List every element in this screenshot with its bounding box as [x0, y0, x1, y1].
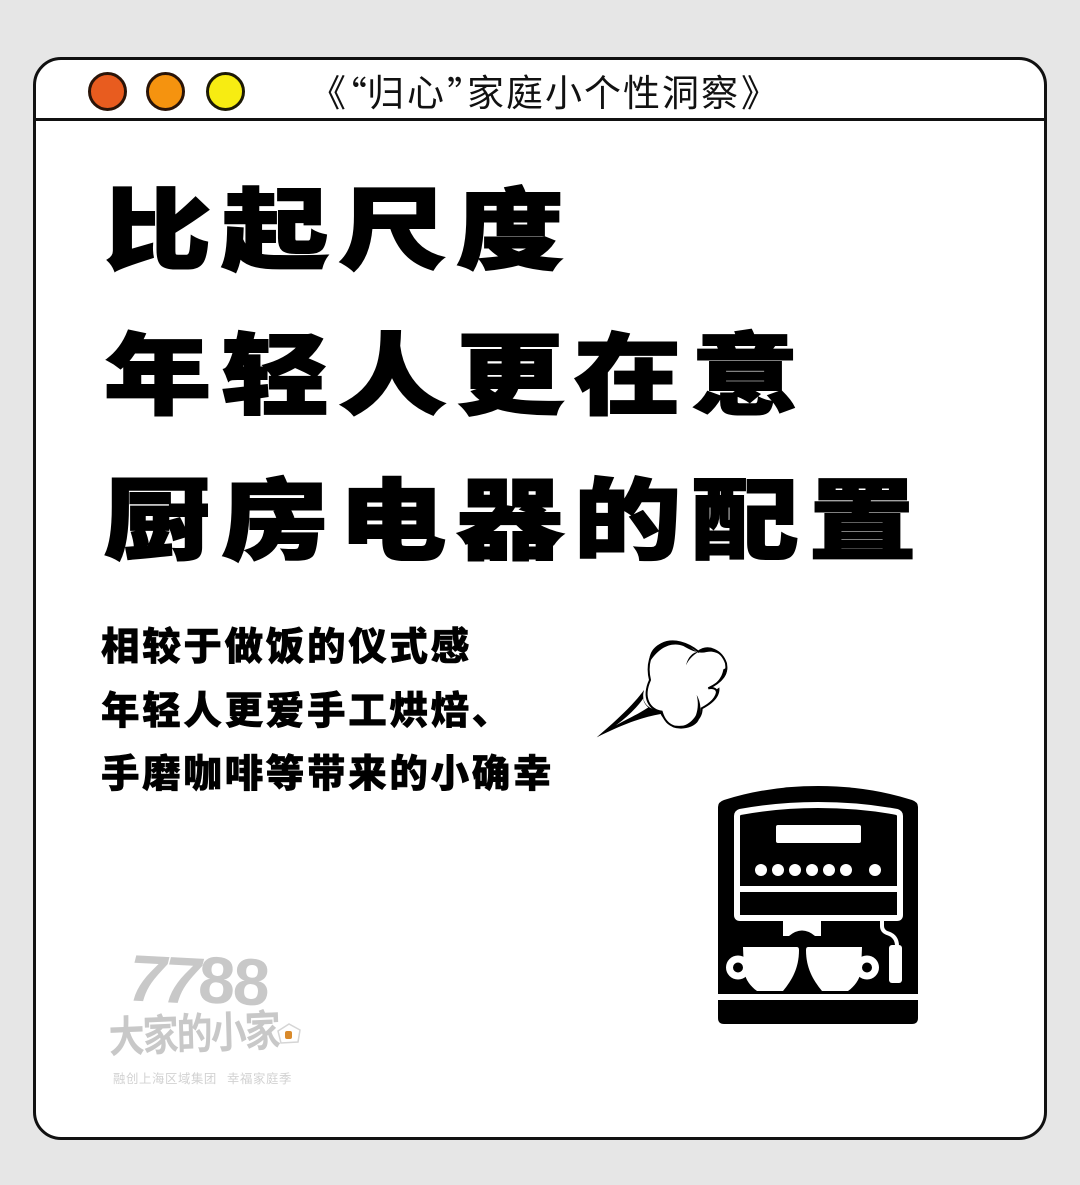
buttons [755, 864, 881, 876]
header title: 家庭小个性洞察 [467, 63, 740, 117]
logo tagline: 融创上海区域集团 幸福家庭季 [113, 1069, 292, 1087]
logo numerals: 7788 [127, 940, 270, 1020]
main heading [104, 159, 927, 578]
main heading: 年轻人更在意 [104, 304, 809, 433]
left cup [726, 947, 799, 991]
brew head [783, 921, 821, 936]
header divider bar [35, 118, 1045, 121]
body text [101, 616, 554, 799]
icon: orange-red window dot [88, 72, 127, 111]
body text: 年轻人更爱手工烘焙、 [101, 680, 513, 736]
icon: orange window dot [146, 72, 185, 111]
panel divider [737, 886, 900, 892]
header title: 归心 [367, 63, 447, 117]
logo wordmark: 大家的小家 [108, 996, 279, 1066]
header title: “ [330, 65, 367, 119]
icon: yellow window dot [206, 72, 245, 111]
icon: coffee machine [718, 786, 918, 1024]
machine base [718, 1000, 918, 1024]
body text: 相较于做饭的仪式感 [101, 616, 472, 672]
logo: 7788 family brand [108, 940, 301, 1087]
steam wand [882, 921, 897, 946]
control panel outline [737, 805, 900, 918]
right cup [806, 947, 879, 991]
main heading: 厨房电器的配置 [104, 449, 927, 578]
main heading: 比起尺度 [104, 159, 574, 288]
logo house icon [277, 1023, 301, 1044]
header title: 》 [741, 63, 778, 117]
header title: 《 [309, 63, 346, 117]
display [776, 825, 861, 843]
icon: steam puff [596, 640, 728, 738]
body text: 手磨咖啡等带来的小确幸 [101, 743, 554, 799]
machine body [718, 786, 918, 994]
header title [309, 63, 778, 119]
header title: ” [447, 65, 484, 119]
